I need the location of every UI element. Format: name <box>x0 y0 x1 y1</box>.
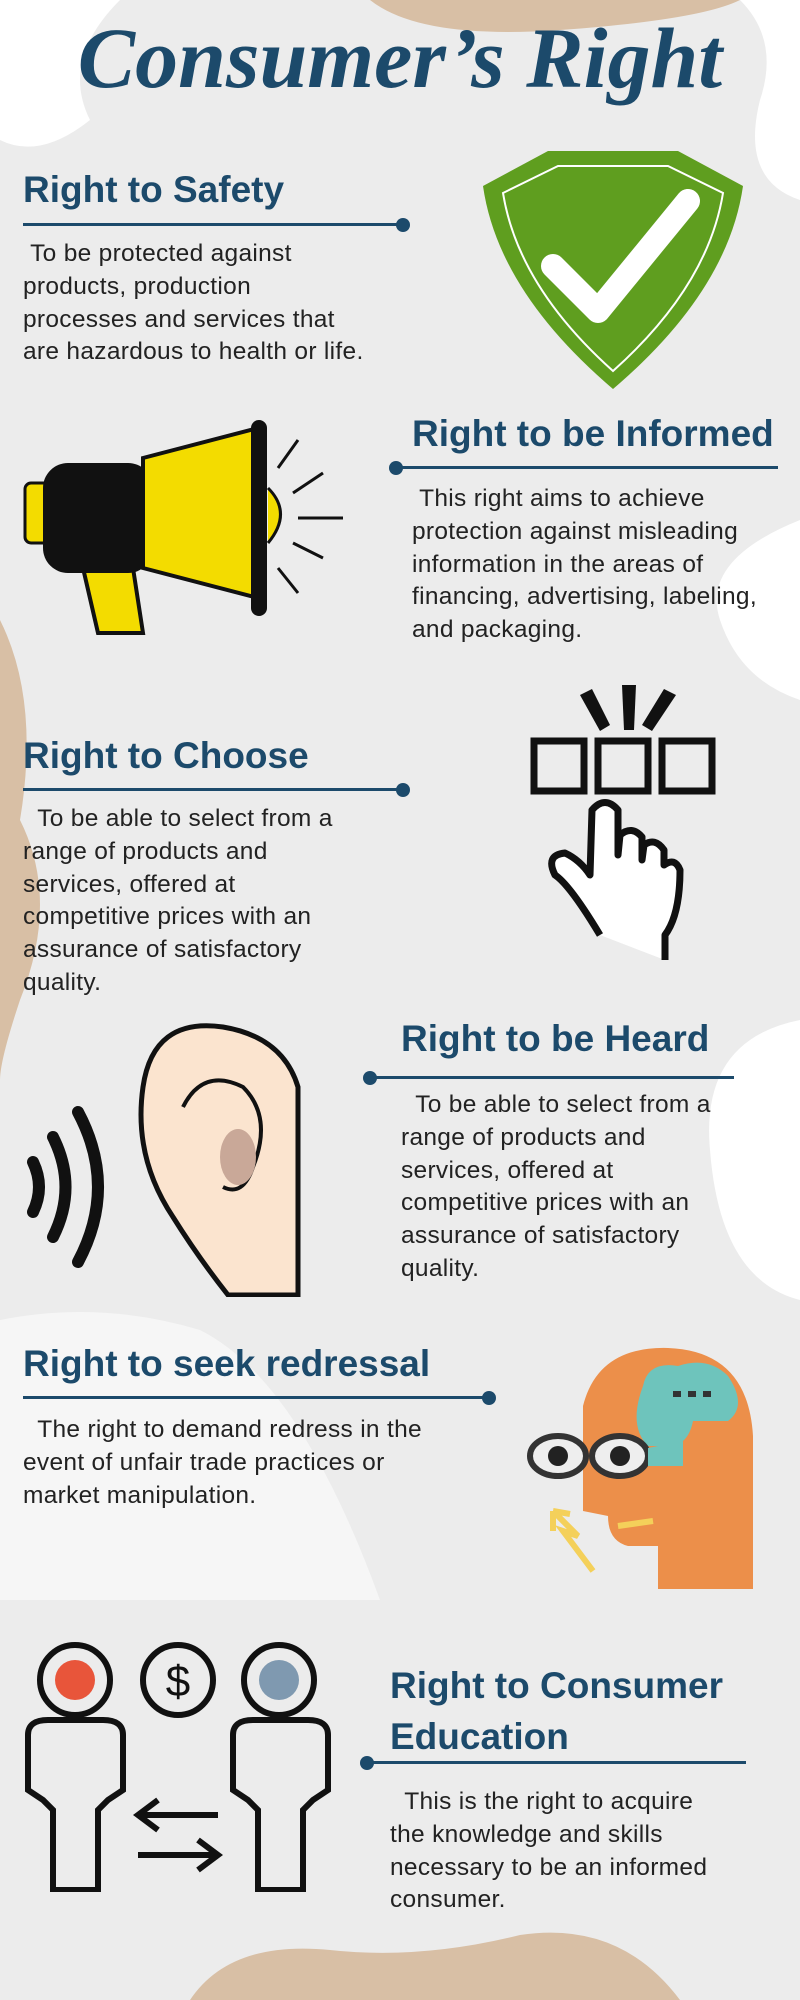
text: heard <box>401 1091 711 1282</box>
icon: head <box>527 1348 753 1589</box>
heading: redressal: Right to seek redressal <box>23 1343 430 1384</box>
heading: choose: Right to Choose <box>23 735 309 776</box>
heading: education: Education <box>390 1716 569 1757</box>
heading: safety: Right to Safety <box>23 169 284 210</box>
text: safety: To be protected against <box>30 240 292 267</box>
heading: informed: Right to be Informed <box>412 413 774 454</box>
text: heard: range of products and <box>401 1124 646 1151</box>
text: education: consumer. <box>390 1886 506 1913</box>
icon: shield <box>483 151 743 389</box>
icon: megaphone <box>24 420 343 635</box>
text: redressal <box>23 1416 422 1509</box>
text: heard: assurance of satisfactory <box>401 1222 679 1249</box>
text: safety: are hazardous to health or life. <box>23 338 364 365</box>
text: redressal: event of unfair trade practices or <box>23 1449 385 1476</box>
text: informed: financing, advertising, labeling, <box>412 583 757 610</box>
text: choose: services, offered at <box>23 871 236 898</box>
text: choose <box>23 805 333 996</box>
text: informed: protection against misleading <box>412 518 738 545</box>
text: education: the knowledge and skills <box>390 1821 663 1848</box>
text: informed: and packaging. <box>412 616 582 643</box>
text: education: necessary to be an informed <box>390 1854 707 1881</box>
text: choose: assurance of satisfactory <box>23 936 301 963</box>
heading: education <box>390 1665 723 1757</box>
text: choose: competitive prices with an <box>23 903 311 930</box>
icon: hand choosing <box>530 685 716 960</box>
text: choose: range of products and <box>23 838 268 865</box>
icon: people exchange <box>25 1642 331 1892</box>
text: informed <box>412 485 757 643</box>
text: redressal: market manipulation. <box>23 1482 256 1509</box>
text: heard: quality. <box>401 1255 479 1282</box>
heading: education: Right to Consumer <box>390 1665 723 1706</box>
text: choose: To be able to select from a <box>37 805 333 832</box>
text: informed: This right aims to achieve <box>419 485 705 512</box>
heading: heard: Right to be Heard <box>401 1018 709 1059</box>
text: safety: processes and services that <box>23 306 335 333</box>
title: Consumer’s Right <box>78 10 722 106</box>
text: safety <box>23 240 364 365</box>
icon: ear <box>27 1023 300 1297</box>
text: informed: information in the areas of <box>412 551 703 578</box>
text: choose: quality. <box>23 969 101 996</box>
text: heard: competitive prices with an <box>401 1189 689 1216</box>
text: education: This is the right to acquire <box>404 1788 693 1815</box>
text: heard: services, offered at <box>401 1157 614 1184</box>
icon: people exchange: $ <box>166 1657 190 1706</box>
text: heard: To be able to select from a <box>415 1091 711 1118</box>
text: safety: products, production <box>23 273 251 300</box>
text: education <box>390 1788 707 1913</box>
text: redressal: The right to demand redress in the <box>37 1416 422 1443</box>
